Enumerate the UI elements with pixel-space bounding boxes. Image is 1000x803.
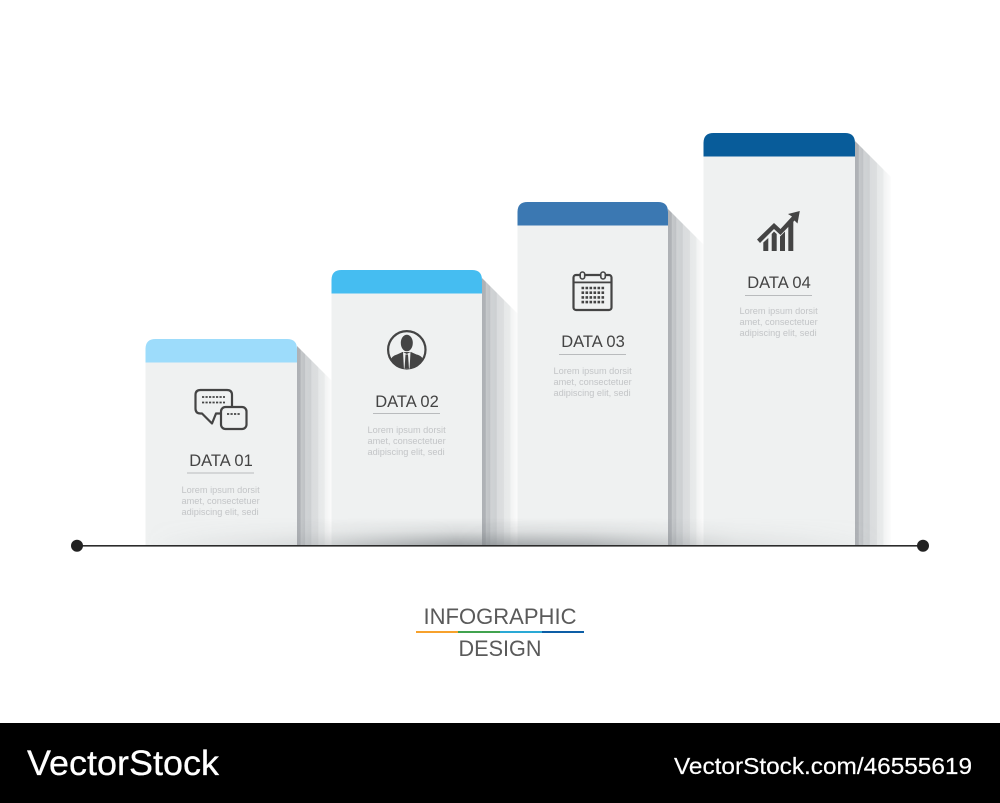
card 4 header xyxy=(704,133,855,156)
card 3 body xyxy=(518,217,668,545)
description text: Lorem ipsum dorsit xyxy=(368,425,446,435)
card 2 header xyxy=(332,270,482,294)
icon: calendar xyxy=(574,272,612,310)
floor shadow xyxy=(200,522,817,545)
heading: data 02: DATA 02 xyxy=(375,393,439,411)
card 1 header xyxy=(146,339,297,362)
baseline axis with end dots xyxy=(71,540,929,552)
heading: data 01: DATA 01 xyxy=(189,452,253,470)
icon: chat bubbles xyxy=(196,390,246,429)
heading rule xyxy=(187,472,254,474)
panel: data 02 xyxy=(332,270,482,545)
heading rule xyxy=(745,295,812,296)
card 2 side shadow xyxy=(482,278,518,545)
heading: data 04: DATA 04 xyxy=(747,274,811,292)
heading: data 03: DATA 03 xyxy=(561,333,625,351)
icon: growth chart xyxy=(757,211,800,251)
description text: adipiscing elit, sedi xyxy=(740,328,817,338)
multicolour divider xyxy=(416,631,584,633)
heading rule xyxy=(559,354,626,355)
footer brand: VectorStock xyxy=(27,744,220,783)
description text: adipiscing elit, sedi xyxy=(554,388,631,398)
description text: amet, consectetuer xyxy=(740,317,818,327)
card 2 body xyxy=(332,285,482,545)
description text: adipiscing elit, sedi xyxy=(368,447,445,457)
title: infographic design xyxy=(416,604,584,661)
title line 2: DESIGN xyxy=(458,636,542,661)
footer bar xyxy=(0,723,1000,803)
card 3 header xyxy=(518,202,668,226)
icon: businessman in circle xyxy=(388,331,425,372)
card 1 side shadow xyxy=(297,346,332,545)
description text: amet, consectetuer xyxy=(554,377,632,387)
description text: Lorem ipsum dorsit xyxy=(740,306,818,316)
description text: amet, consectetuer xyxy=(368,436,446,446)
panel: data 01 xyxy=(146,339,297,545)
description text: Lorem ipsum dorsit xyxy=(554,366,632,376)
title line 1: INFOGRAPHIC xyxy=(424,604,576,629)
card 1 body xyxy=(146,355,297,545)
card 4 body xyxy=(704,148,855,545)
panel: data 04 xyxy=(704,133,855,545)
description text: adipiscing elit, sedi xyxy=(182,507,259,517)
heading rule xyxy=(373,413,440,414)
card 4 side shadow xyxy=(855,141,891,545)
panel: data 03 xyxy=(518,202,668,545)
card 3 side shadow xyxy=(668,209,704,545)
description text: amet, consectetuer xyxy=(182,496,260,506)
footer image id: VectorStock.com/46555619 xyxy=(674,753,972,779)
description text: Lorem ipsum dorsit xyxy=(182,485,260,495)
